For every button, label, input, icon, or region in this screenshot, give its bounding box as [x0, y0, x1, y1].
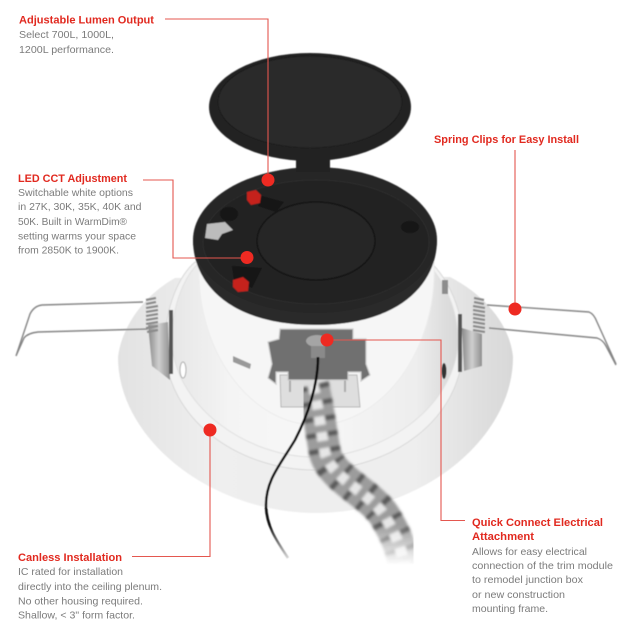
silver connector	[205, 222, 233, 240]
callout: Adjustable Lumen Output: Adjustable Lumen Output	[19, 14, 154, 26]
callout: Adjustable Lumen Output: Select 700L, 1000L,	[19, 29, 114, 41]
callout: LED CCT Adjustment: in 27K, 30K, 35K, 40K and	[18, 201, 142, 213]
callout: Quick Connect Electrical Attachment: Quick Connect Electrical	[472, 517, 603, 529]
callout: Quick Connect Electrical Attachment: or new construction	[472, 589, 565, 601]
callout: Adjustable Lumen Output: 1200L performance.	[19, 44, 114, 56]
callout: LED CCT Adjustment: Switchable white options	[18, 187, 133, 199]
left spring clip	[16, 298, 173, 380]
lower black housing	[193, 167, 437, 325]
callout: Canless Installation: Shallow, < 3" form factor.	[18, 610, 135, 622]
flexible conduit	[313, 385, 404, 566]
lid	[209, 53, 411, 161]
callout: Quick Connect Electrical Attachment: connection of the trim module	[472, 560, 613, 572]
trim body	[165, 262, 463, 470]
screw bosses	[220, 207, 238, 221]
callout: LED CCT Adjustment: setting warms your space	[18, 230, 136, 242]
callout: Quick Connect Electrical Attachment: Allows for easy electrical	[472, 546, 587, 558]
callout: LED CCT Adjustment	[18, 173, 254, 264]
callout: Canless Installation: No other housing required.	[18, 596, 143, 608]
fade at base of cables	[255, 525, 430, 565]
callout: LED CCT Adjustment: from 2850K to 1900K.	[18, 244, 119, 256]
right spring clip	[458, 298, 616, 372]
centre puck	[257, 202, 375, 280]
callout: Quick Connect Electrical Attachment	[320, 334, 613, 615]
hinge	[296, 154, 330, 172]
callout: Canless Installation: Canless Installation	[18, 552, 122, 564]
product: canless downlight illustration	[16, 53, 616, 572]
callout: LED CCT Adjustment: 50K. Built in WarmDim®	[18, 216, 127, 228]
callout: Canless Installation	[18, 424, 216, 622]
flange	[118, 277, 513, 513]
callout: Adjustable Lumen Output	[19, 14, 274, 186]
callout: Quick Connect Electrical Attachment: to remodel junction box	[472, 574, 584, 586]
callout: LED CCT Adjustment: LED CCT Adjustment	[18, 173, 127, 185]
junction box	[268, 329, 370, 407]
callout: Spring Clips for Easy Install	[434, 134, 579, 316]
callout: Canless Installation: IC rated for installation	[18, 566, 123, 578]
callout: Quick Connect Electrical Attachment: mounting frame.	[472, 603, 548, 615]
black wire	[266, 357, 318, 558]
callout: Quick Connect Electrical Attachment: Attachment	[472, 531, 534, 543]
mounting holes and tabs	[180, 280, 448, 379]
callout: Spring Clips for Easy Install: Spring Clips for Easy Install	[434, 134, 579, 146]
red switches	[247, 190, 261, 205]
switch banks	[258, 196, 284, 212]
callout: Canless Installation: directly into the ceiling plenum.	[18, 581, 162, 593]
